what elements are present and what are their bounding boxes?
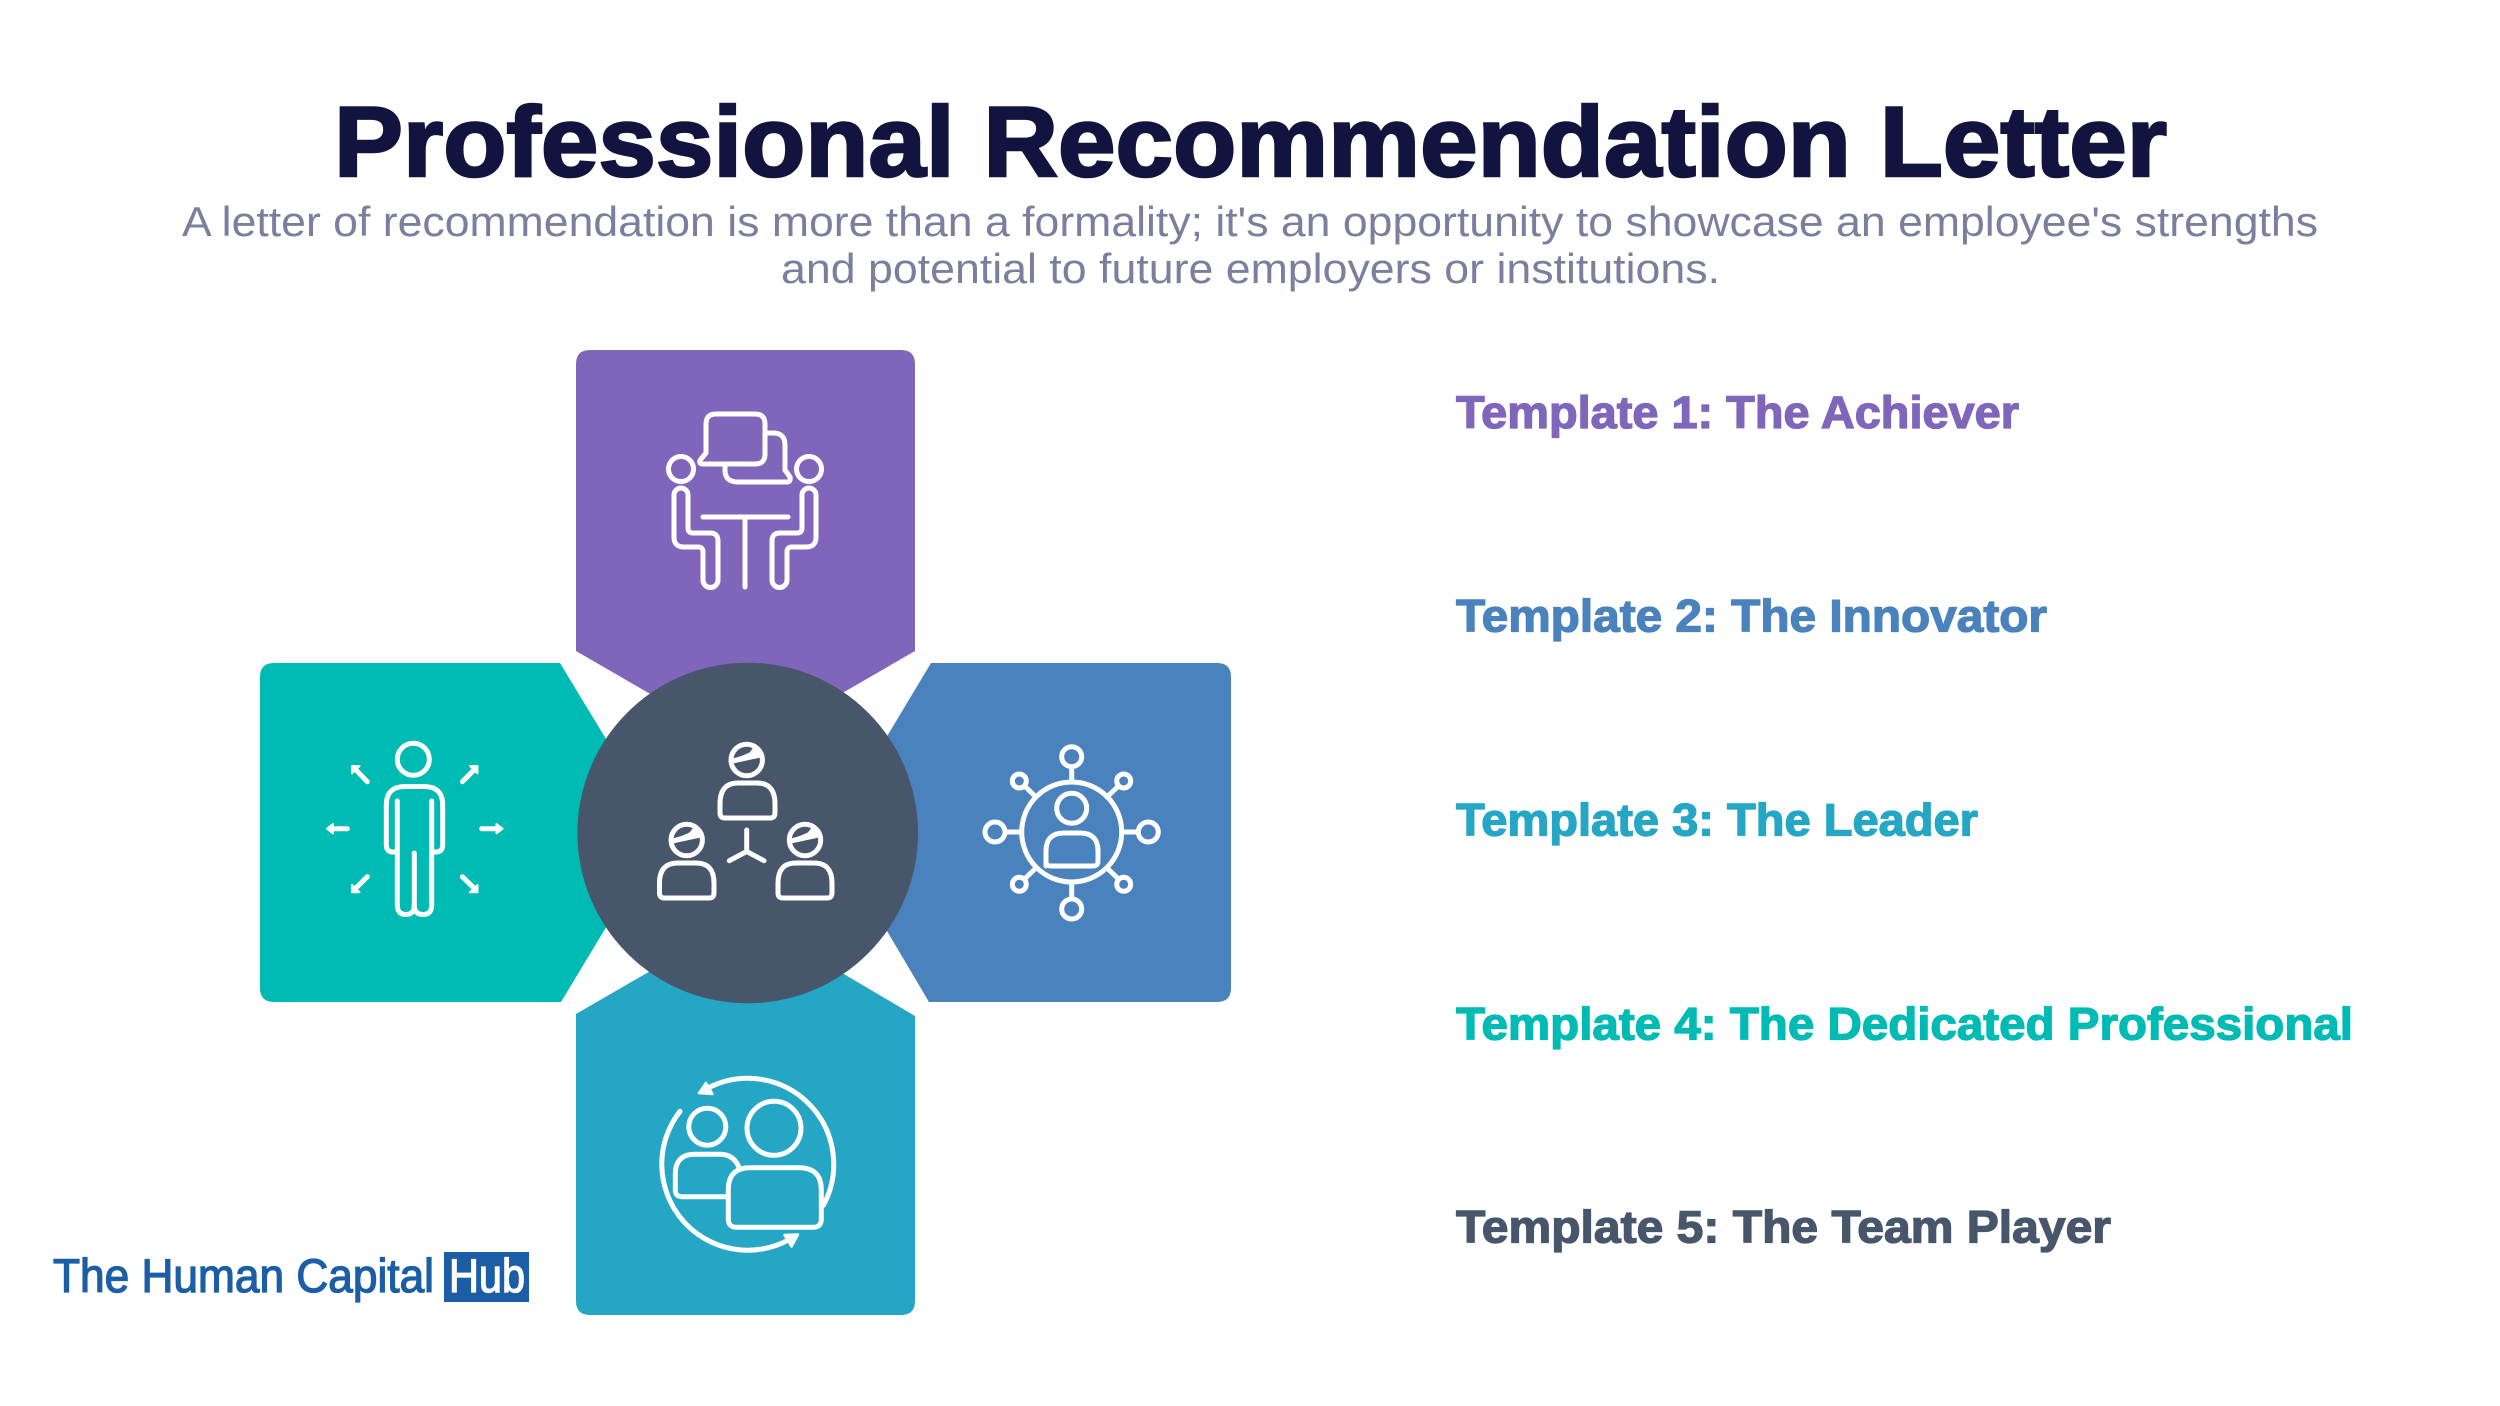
- panel: top purple: [576, 350, 915, 749]
- title: Professional Recommendation Letter: [334, 86, 2167, 197]
- subtitle: A letter of recommendation is more than a formality; it's an opportunity to showcase an employee's strengths: [182, 198, 2318, 245]
- icon: two people talking at a table: [668, 414, 822, 588]
- subtitle: [182, 198, 2318, 292]
- template 1 label: Template 1: The Achiever: [1456, 387, 2019, 438]
- template 3 label: Template 3: The Leader: [1456, 794, 1978, 846]
- template 4 label: Template 4: The Dedicated Professional: [1456, 998, 2353, 1050]
- panel: left teal: [260, 663, 663, 1002]
- center circle: [577, 663, 918, 1003]
- template 5 label: Template 5: The Team Player: [1456, 1202, 2111, 1252]
- icon: person with outward arrows: [327, 743, 502, 914]
- logo: The Human Capital Hub: Hub: [449, 1249, 525, 1302]
- icon: person in network hub: [985, 747, 1158, 919]
- panel: right blue: [829, 663, 1231, 1002]
- icon: two people in rotating circle: [662, 1078, 834, 1250]
- panel: bottom cyan: [576, 916, 915, 1315]
- logo: The Human Capital Hub: The Human Capital: [53, 1249, 434, 1302]
- template 2 label: Template 2: The Innovator: [1456, 590, 2047, 642]
- subtitle: and potential to future employers or institutions.: [781, 245, 1720, 292]
- icon: three people hierarchy: [660, 744, 832, 898]
